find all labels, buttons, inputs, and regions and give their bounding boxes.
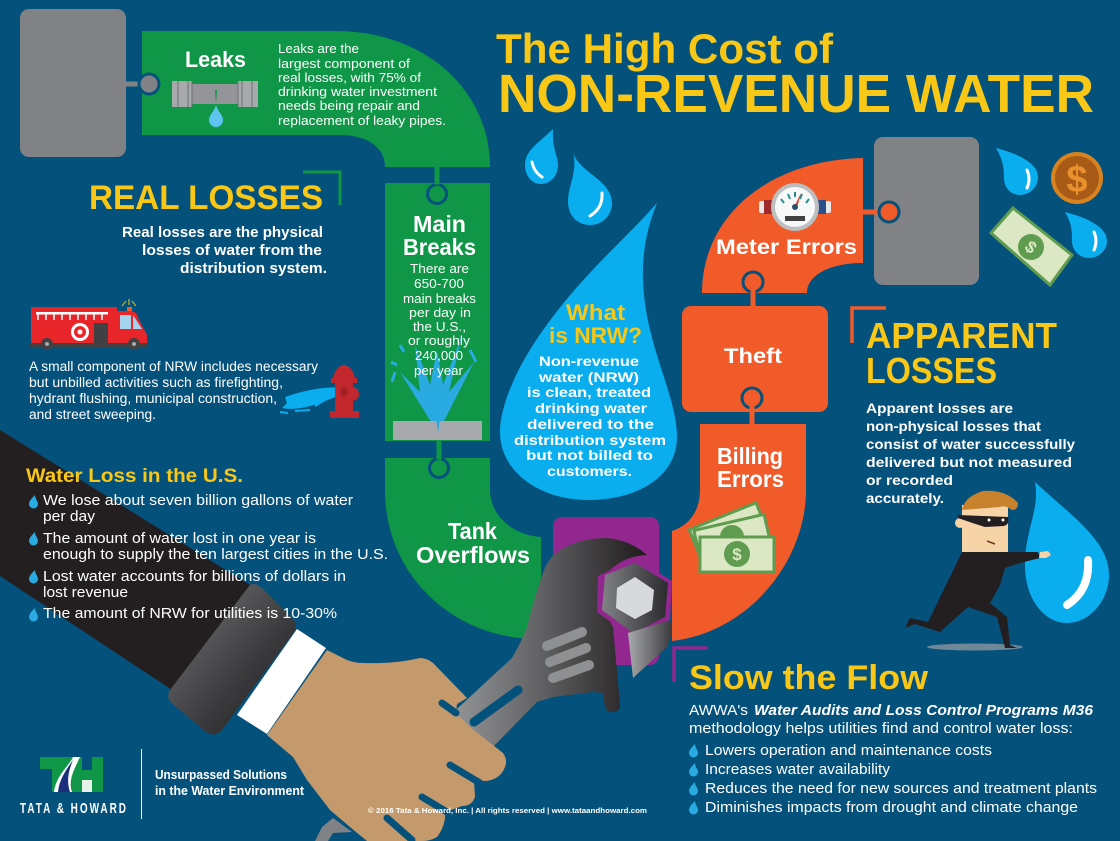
text: leaks description: [278, 42, 446, 128]
icon: water burst: [391, 335, 482, 440]
text: NRW definition: distribution system: [514, 432, 666, 448]
list: benefits: Increases water availability: [705, 762, 891, 778]
heading: tank overflows: Overflows: [416, 542, 530, 568]
panel: apparent losses: delivered but not measured: [866, 454, 1072, 470]
text: NRW definition: drinking water: [535, 400, 648, 416]
text: AWWA methodology: [689, 703, 1094, 737]
panel: apparent losses: Apparent losses are: [866, 400, 1013, 416]
panel: real losses: Real losses are the physical: [122, 225, 323, 241]
shirt cuff: [237, 629, 326, 734]
heading: meter errors: Meter Errors: [716, 236, 857, 259]
list: water loss facts: lost revenue: [43, 585, 128, 601]
panel: leaks pipe: [124, 31, 490, 167]
panel: real losses: distribution system.: [180, 261, 327, 277]
list: water loss facts: [29, 493, 388, 622]
icon: big water drop: [1025, 482, 1109, 623]
text: unbilled activities: A small component of NRW includes necessary: [29, 359, 318, 374]
logo: Tata & Howard: TATA & HOWARD: [20, 800, 128, 817]
heading: what is NRW: [549, 300, 642, 348]
panel: slow the flow: [674, 648, 1097, 816]
icon: small water drop two: [568, 152, 612, 225]
heading: tank overflows: Tank: [448, 518, 497, 544]
panel: apparent losses: [852, 308, 1075, 506]
illustration: thief: [905, 491, 1051, 650]
title: NON-REVENUE WATER: [498, 64, 1094, 124]
text: NRW definition: is clean, treated: [527, 384, 651, 400]
panel: water loss in the U.S.: [26, 466, 388, 622]
connector: main breaks to tank overflows: [430, 440, 448, 478]
right tank: [874, 137, 979, 285]
title: [496, 25, 1094, 124]
list: water loss facts: The amount of water lost in one year is: [43, 531, 316, 547]
text: main breaks description: or roughly: [408, 334, 471, 348]
text: main breaks description: per year: [414, 364, 463, 378]
panel: apparent losses: LOSSES: [866, 350, 997, 391]
copyright: © 2016 Tata & Howard, Inc. | All rights reserved | www.tataandhoward.com: [368, 807, 647, 815]
heading: billing errors: Errors: [717, 466, 784, 492]
icon: small water drop one: [525, 129, 558, 184]
list: benefits: Diminishes impacts from drought and climate change: [705, 800, 1078, 816]
icon: dollar bill: $: [1021, 237, 1041, 258]
text: main breaks description: the U.S.,: [413, 320, 466, 334]
panel: apparent losses: accurately.: [866, 490, 944, 506]
logo: Tata & Howard: in the Water Environment: [155, 784, 305, 798]
text: main breaks description: There are: [410, 262, 469, 276]
list: water loss facts: We lose about seven billion gallons of water: [43, 493, 353, 509]
icon: leaking pipe: [172, 81, 258, 127]
panel: main breaks pipe: [385, 165, 490, 441]
panel: real losses: [89, 172, 340, 277]
panel: real losses: REAL LOSSES: [89, 179, 323, 217]
text: NRW definition: customers.: [547, 463, 632, 479]
connector: left tank valve: [124, 74, 159, 94]
connector: meter errors to theft: [743, 272, 763, 308]
panel: billing errors pipe: [672, 388, 806, 641]
text: unbilled activities: hydrant flushing, municipal construction,: [29, 391, 277, 406]
purple tank: [553, 517, 659, 665]
icon: water drop and coin group: $: [1066, 159, 1088, 201]
panel: real losses: losses of water from the: [142, 243, 322, 259]
text: main breaks description: 650-700: [414, 277, 464, 291]
panel: apparent losses: or recorded: [866, 472, 953, 488]
heading: theft: Theft: [724, 345, 782, 368]
list: benefits: Lowers operation and maintenance costs: [705, 743, 992, 759]
text: AWWA methodology: AWWA's: [689, 703, 748, 719]
text: leaks description: needs being repair and: [278, 99, 420, 113]
icon: fire truck: [30, 299, 148, 350]
panel: water loss in the U.S.: Water Loss in the U.S.: [26, 466, 243, 487]
heading: main breaks: [403, 211, 476, 260]
text: leaks description: largest component of: [278, 57, 411, 71]
list: water loss facts: enough to supply the ten largest cities in the U.S.: [43, 547, 388, 563]
icon: fire hydrant: [280, 365, 359, 418]
text: NRW definition: delivered to the: [527, 416, 654, 432]
panel: apparent losses: APPARENT: [866, 315, 1057, 356]
text: unbilled activities: [29, 359, 318, 422]
text: main breaks description: main breaks: [403, 292, 476, 306]
connector: meter to right tank: [860, 202, 899, 222]
illustration: hand: [267, 650, 506, 841]
panel: tank overflows pipe: [385, 440, 541, 640]
list: benefits: Reduces the need for new sources and treatment plants: [705, 781, 1097, 797]
text: NRW definition: but not billed to: [526, 447, 653, 463]
sleeve of arm: [0, 430, 250, 690]
text: leaks description: drinking water investment: [278, 85, 438, 99]
panel: what is NRW drop: [500, 203, 677, 500]
panel: theft pipe: [682, 272, 828, 412]
heading: main breaks: Breaks: [403, 234, 476, 260]
logo: Tata & Howard: Unsurpassed Solutions: [155, 768, 287, 782]
icon: wrench: [315, 538, 672, 841]
heading: leaks: Leaks: [185, 47, 246, 72]
left tank: [20, 9, 142, 157]
text: unbilled activities: and street sweeping.: [29, 407, 156, 422]
text: main breaks description: per day in: [409, 306, 471, 320]
text: NRW definition: water (NRW): [538, 369, 639, 385]
panel: apparent losses: non-physical losses that: [866, 418, 1041, 434]
icon: water meter: [759, 183, 831, 231]
heading: what is NRW: What: [566, 300, 626, 325]
text: leaks description: replacement of leaky pipes.: [278, 114, 446, 128]
jacket cuff: [168, 584, 296, 735]
panel: apparent losses: consist of water successfully: [866, 436, 1075, 452]
text: unbilled activities: but unbilled activities such as firefighting,: [29, 375, 283, 390]
title: The High Cost of: [496, 25, 834, 72]
panel: slow the flow: Slow the Flow: [689, 659, 929, 697]
icon: money stack: [689, 503, 774, 572]
heading: billing errors: [717, 443, 784, 492]
text: leaks description: Leaks are the: [278, 42, 359, 56]
text: AWWA methodology: Water Audits and Loss Control Programs M36: [754, 703, 1094, 719]
text: NRW definition: Non-revenue: [539, 353, 639, 369]
panel: meter errors pipe: [702, 158, 899, 293]
text: NRW definition: [514, 353, 666, 479]
icon: water drop and coin group: [996, 148, 1107, 258]
text: main breaks description: 240,000: [415, 349, 463, 363]
connector: upper elbow to main breaks: [428, 165, 446, 204]
icon: money stack: $: [732, 545, 742, 564]
connector: theft to billing errors: [742, 388, 762, 426]
list: water loss facts: Lost water accounts for billions of dollars in: [43, 569, 346, 585]
logo: Tata & Howard: [20, 749, 305, 819]
heading: tank overflows: [416, 518, 530, 568]
list: water loss facts: The amount of NRW for utilities is 10-30%: [43, 606, 337, 622]
text: AWWA methodology: methodology helps utilities find and control water loss:: [689, 721, 1073, 737]
heading: billing errors: Billing: [717, 443, 783, 469]
list: water loss facts: per day: [43, 509, 96, 525]
text: leaks description: real losses, with 75% of: [278, 71, 422, 85]
heading: main breaks: Main: [413, 211, 466, 237]
heading: what is NRW: is NRW?: [549, 323, 642, 348]
icon: dollar bill: [991, 208, 1072, 285]
list: benefits: [689, 743, 1097, 816]
text: main breaks description: [403, 262, 476, 378]
